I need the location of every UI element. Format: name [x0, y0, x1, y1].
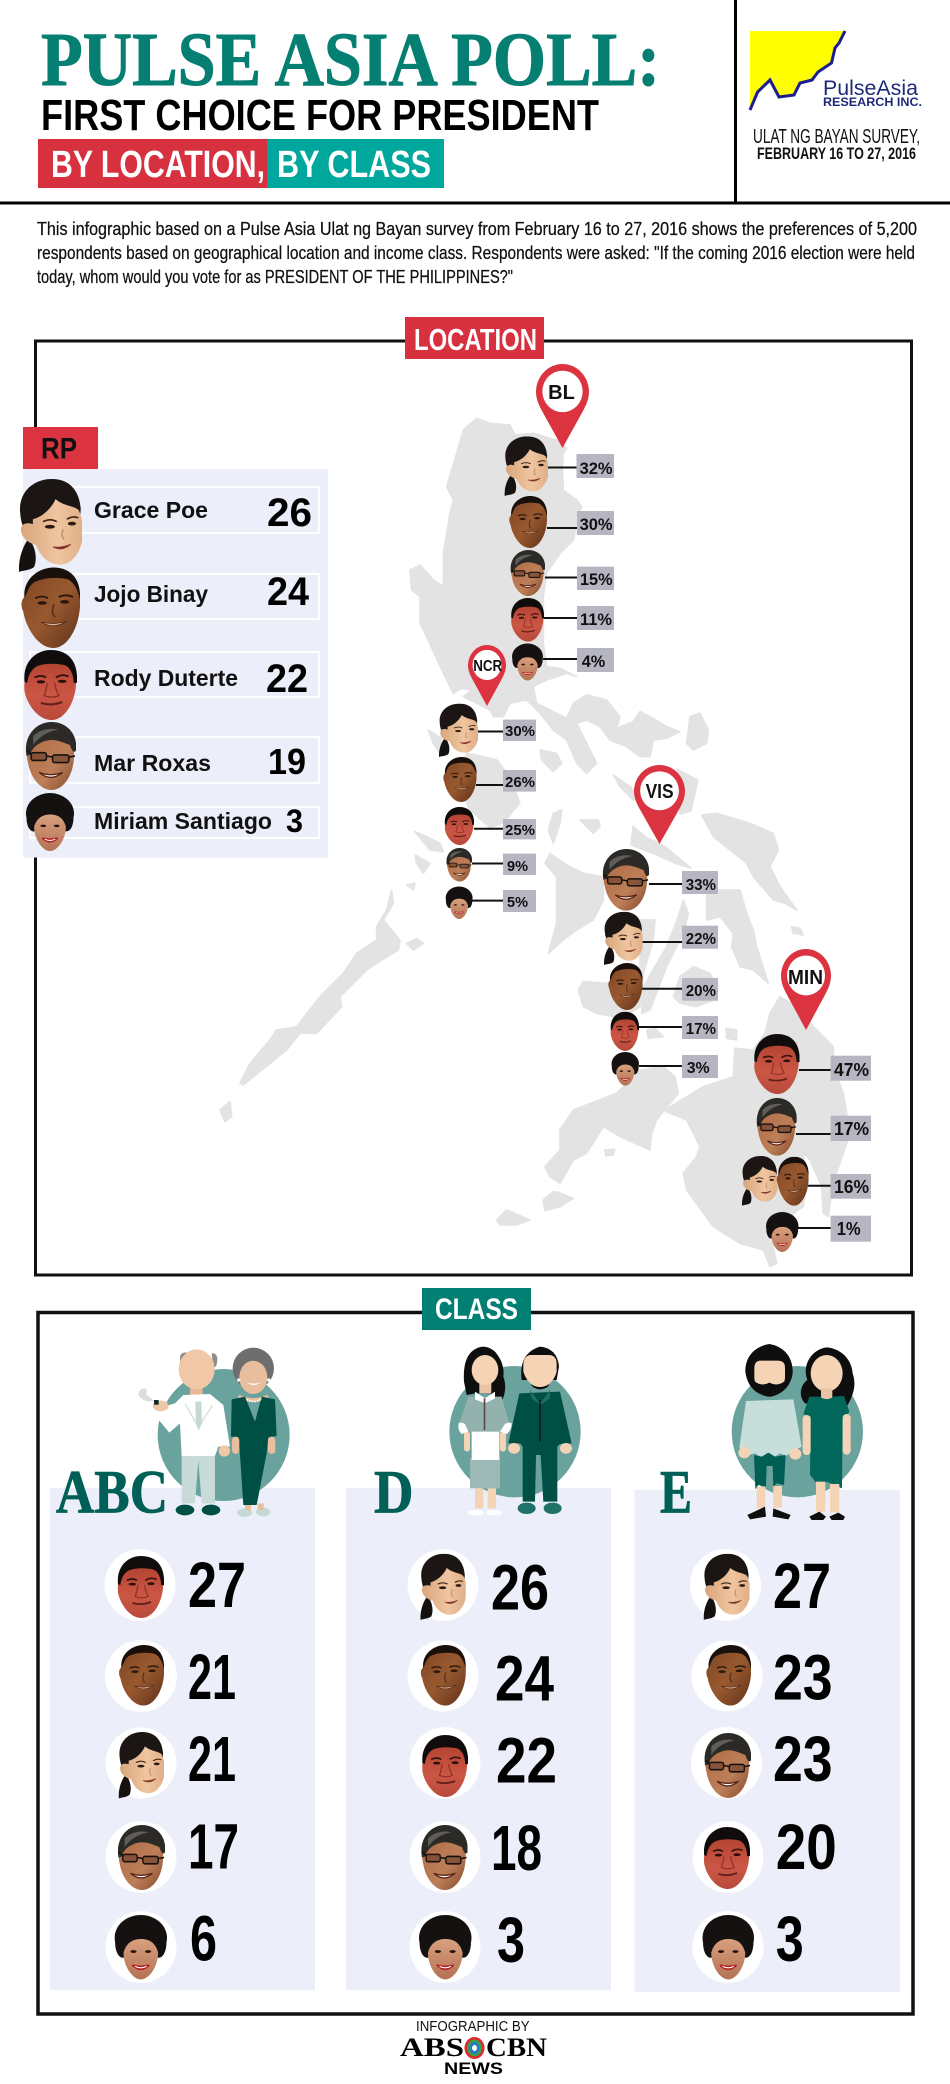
results: MIN: 47% — [834, 1060, 869, 1080]
group: Visayas — [603, 765, 718, 1086]
results: D: 22 — [496, 1725, 557, 1797]
results: BL: 15% — [580, 571, 613, 589]
results: ABC — [104, 1549, 246, 1983]
results: E: 23 — [773, 1723, 833, 1795]
results: D: 24 — [495, 1643, 554, 1715]
results: D — [408, 1549, 557, 1983]
logo: ABS-CBN News: NEWS — [444, 2059, 503, 2078]
pin: MIN — [781, 949, 831, 1030]
results: NCR: 9% — [507, 858, 528, 875]
tag: location: LOCATION — [414, 322, 537, 357]
results: ABC: 6 — [190, 1902, 217, 1974]
column: E — [635, 1344, 900, 1992]
row: Miriam Santiago — [26, 793, 319, 851]
results: VIS: 20% — [686, 983, 716, 1000]
row: Grace Poe: Grace Poe — [94, 497, 208, 523]
tag: RP — [23, 427, 98, 469]
pin: VIS: VIS — [646, 781, 674, 803]
row: Rody Duterte: Rody Duterte — [94, 665, 238, 691]
heading: E: E — [660, 1460, 692, 1527]
logo: ABS-CBN News — [400, 2033, 547, 2078]
results: NCR: 30% — [505, 723, 535, 740]
logo: Pulse Asia Research: PulseAsia — [823, 77, 918, 100]
results: E: 20 — [776, 1811, 837, 1883]
column: ABC — [50, 1348, 315, 1990]
results: D: 3 — [497, 1904, 525, 1976]
heading: D: D — [374, 1460, 414, 1527]
results: ABC: 17 — [188, 1810, 239, 1882]
results: VIS — [603, 849, 718, 1086]
results: MIN: 16% — [834, 1177, 869, 1197]
survey label — [753, 126, 920, 163]
intro paragraph: today, whom would you vote for as PRESIDENT OF THE PHILIPPINES?" — [37, 267, 513, 287]
pin: NCR — [468, 645, 506, 706]
illustration: E couple — [732, 1344, 863, 1520]
results: ABC: 27 — [188, 1549, 246, 1621]
illustration: ABC couple — [138, 1348, 290, 1517]
results: E: 3 — [776, 1903, 804, 1975]
row: Mar Roxas: 19 — [268, 741, 306, 782]
intro paragraph — [37, 219, 917, 287]
results: VIS: 17% — [686, 1021, 716, 1038]
pin: VIS — [634, 765, 685, 844]
results: VIS: 3% — [687, 1060, 710, 1077]
pin: BL — [536, 364, 589, 448]
results: BL — [505, 436, 614, 680]
tag: location — [405, 317, 544, 359]
logo: ABS-CBN News: ABS — [400, 2033, 464, 2062]
tag: by location — [38, 139, 267, 188]
results: MIN: 17% — [834, 1119, 869, 1139]
results: NCR: 25% — [505, 822, 535, 839]
tag: by class: BY CLASS — [277, 144, 431, 186]
row: Grace Poe — [19, 479, 319, 572]
footer credit: INFOGRAPHIC BY — [416, 2018, 530, 2035]
map of the Philippines — [220, 418, 850, 1267]
illustration: D couple — [449, 1347, 581, 1515]
subtitle: FIRST CHOICE FOR PRESIDENT — [41, 91, 599, 140]
logo: Pulse Asia Research: RESEARCH INC. — [823, 95, 922, 109]
row: Mar Roxas: Mar Roxas — [94, 750, 211, 776]
group: Mindanao — [742, 949, 871, 1252]
row: Mar Roxas — [26, 722, 319, 790]
results: ABC: 21 — [188, 1641, 236, 1713]
results: BL: 11% — [580, 611, 612, 629]
results: D: 26 — [491, 1552, 549, 1624]
panel: RP national results — [19, 427, 328, 858]
row: Grace Poe: 26 — [267, 491, 312, 535]
results: E — [690, 1549, 837, 1983]
results: NCR — [439, 704, 536, 919]
row: Miriam Santiago: 3 — [286, 803, 303, 839]
results: VIS: 33% — [686, 877, 716, 894]
results: E: 27 — [773, 1550, 831, 1622]
row: Jojo Binay — [21, 568, 319, 648]
results: D: 18 — [491, 1812, 542, 1884]
tag: by location: BY LOCATION, — [51, 144, 265, 186]
pin: BL: BL — [548, 382, 575, 404]
heading: ABC: ABC — [56, 1460, 168, 1527]
results: BL: 32% — [580, 460, 613, 478]
results: BL: 30% — [580, 516, 613, 534]
row: Jojo Binay: 24 — [267, 570, 310, 614]
logo: Pulse Asia Research — [750, 31, 922, 110]
results: NCR: 26% — [505, 774, 535, 791]
title: PULSE ASIA POLL: — [41, 18, 660, 102]
group: Balance of Luzon — [505, 364, 614, 680]
row: Rody Duterte — [24, 650, 319, 720]
pin: NCR: NCR — [473, 658, 502, 675]
panel: class — [38, 1312, 913, 2014]
tag: class — [422, 1288, 531, 1330]
tag: class: CLASS — [435, 1293, 518, 1326]
row: Rody Duterte: 22 — [266, 657, 308, 701]
row: Miriam Santiago: Miriam Santiago — [94, 808, 272, 834]
footer credit — [400, 2018, 547, 2078]
group: NCR — [439, 645, 536, 919]
results: NCR: 5% — [507, 894, 528, 911]
row: Jojo Binay: Jojo Binay — [94, 581, 208, 607]
results: VIS: 22% — [686, 931, 716, 948]
column: D — [346, 1347, 611, 1990]
panel: location — [36, 341, 912, 1275]
logo: ABS-CBN News: CBN — [486, 2033, 547, 2062]
results: ABC: 21 — [188, 1723, 236, 1795]
tag: RP: RP — [41, 433, 77, 466]
results: MIN — [742, 1034, 871, 1252]
pin: MIN: MIN — [788, 967, 823, 989]
results: E: 23 — [773, 1642, 833, 1714]
results: BL: 4% — [582, 653, 606, 671]
results: MIN: 1% — [837, 1219, 861, 1239]
